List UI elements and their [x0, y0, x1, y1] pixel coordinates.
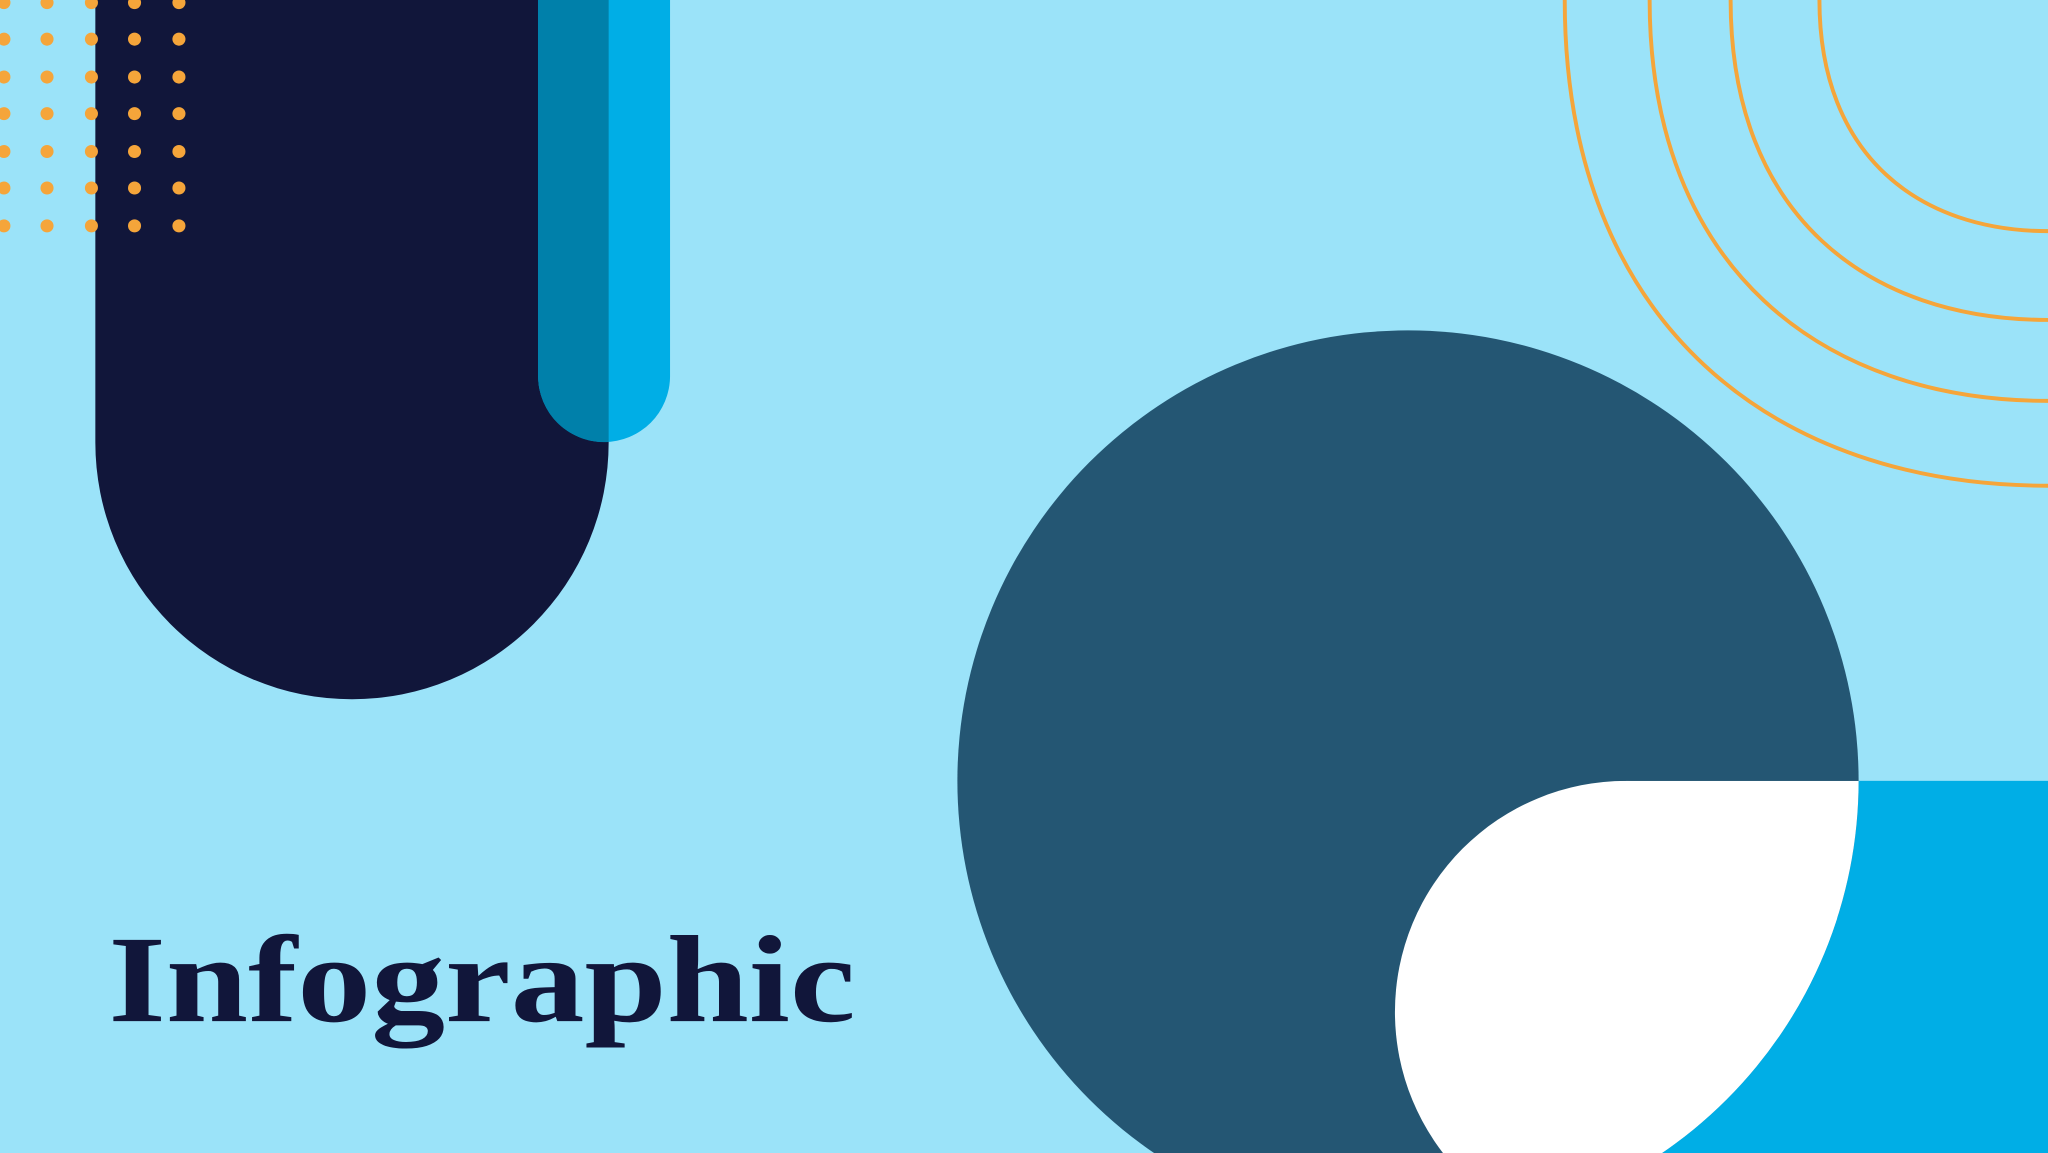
shape: big dark circle — [957, 330, 1859, 1153]
decoration: orange dot grid — [0, 0, 185, 232]
title: Infographic — [108, 910, 856, 1049]
shape: teal pill — [538, 0, 670, 442]
decoration: orange concentric arcs — [1565, 0, 2048, 486]
shape: navy pill — [95, 0, 609, 699]
shape: bright blue block — [1408, 781, 2048, 1153]
shape: white quarter cutout — [1394, 780, 1859, 1153]
